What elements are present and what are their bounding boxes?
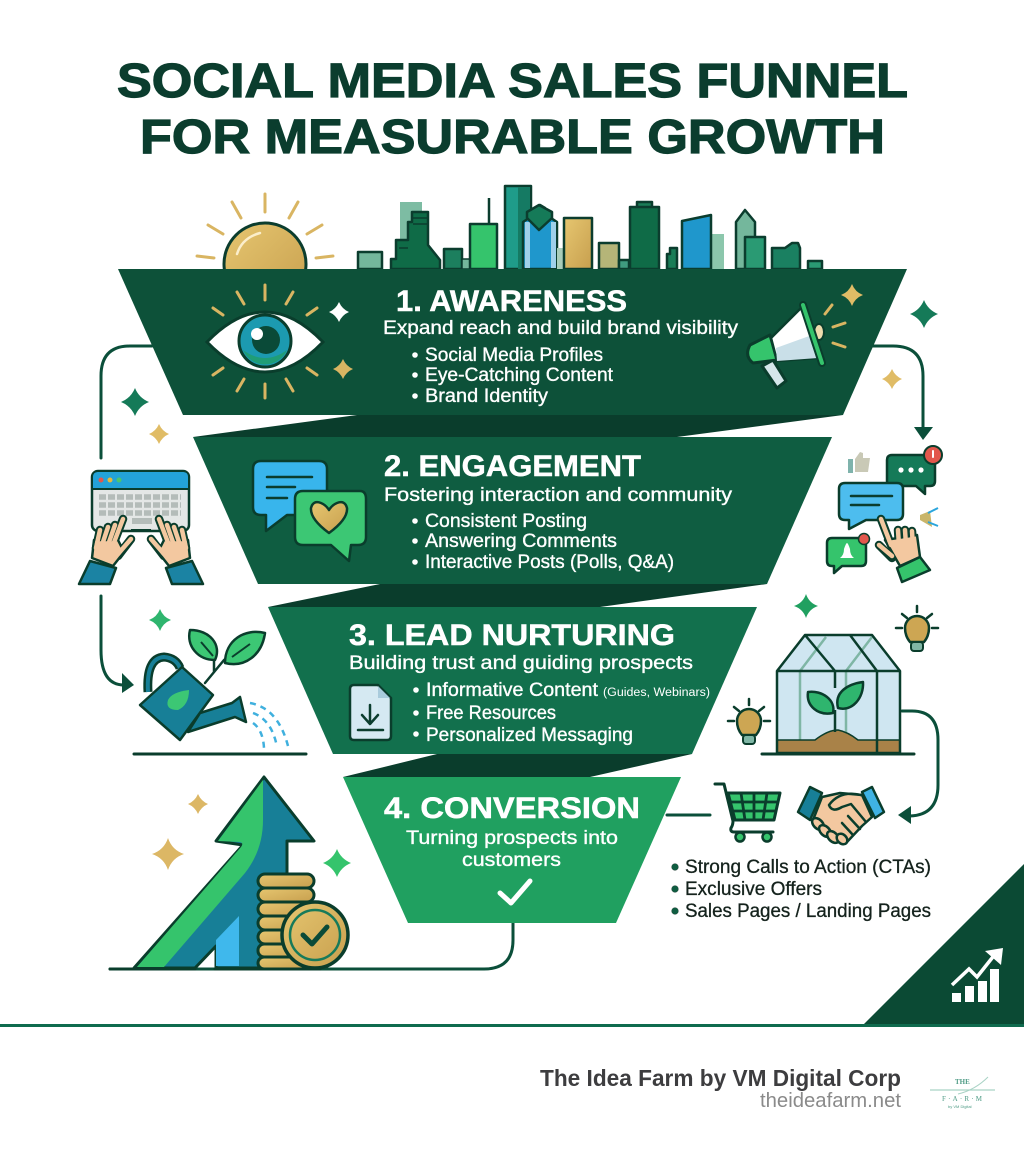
list: lead nurturing items bbox=[413, 680, 710, 746]
connector: awareness to engagement icons bbox=[873, 346, 933, 440]
icon: sun bbox=[196, 192, 334, 269]
icon: growth arrow with coins bbox=[110, 777, 351, 969]
list: engagement items: Consistent Posting bbox=[425, 511, 587, 532]
footer: company name: The Idea Farm by VM Digital Corp bbox=[540, 1065, 901, 1091]
panel: conversion: customers bbox=[462, 850, 561, 871]
connector: greenhouse to handshake bbox=[898, 711, 938, 824]
icon: watering can with plant bbox=[134, 609, 306, 754]
connector: keyboard to watering can bbox=[101, 596, 134, 693]
icon: white sparkle bbox=[329, 302, 349, 322]
icon: green sparkle left bbox=[121, 388, 149, 416]
icon: gold sparkle right bbox=[841, 284, 863, 306]
icon: light bulb left bbox=[728, 699, 770, 744]
icon: handshake bbox=[798, 787, 884, 846]
connector: conversion to growth arrow bbox=[110, 923, 513, 969]
title: SOCIAL MEDIA SALES FUNNEL bbox=[117, 55, 908, 108]
icon: megaphone bbox=[748, 305, 845, 388]
list: engagement items bbox=[412, 511, 674, 573]
panel: engagement shadow bbox=[268, 584, 767, 607]
list: conversion items: Exclusive Offers bbox=[685, 879, 822, 900]
icon: gold sparkle right bbox=[882, 369, 902, 389]
footer: logo: F·A·R·M bbox=[942, 1095, 984, 1103]
text: engagement subtitle: Fostering interaction and community bbox=[384, 485, 733, 506]
heading: conversion: 4. CONVERSION bbox=[384, 792, 640, 825]
panel: lead nurturing shadow bbox=[343, 754, 692, 777]
list: awareness items: Brand Identity bbox=[425, 386, 549, 407]
panel: engagement bbox=[193, 437, 832, 584]
footer: logo: by VM Digital bbox=[948, 1104, 972, 1109]
footer: website: theideafarm.net bbox=[760, 1090, 901, 1112]
panel: awareness shadow bbox=[193, 415, 843, 437]
icon: social notifications and pointing hand bbox=[827, 446, 942, 582]
list: awareness items bbox=[412, 345, 614, 407]
footer: logo: THE bbox=[955, 1078, 970, 1086]
icon: gold sparkle left bbox=[149, 424, 169, 444]
list: lead nurturing items: Free Resources bbox=[426, 703, 556, 724]
icon: greenhouse with seedling bbox=[762, 594, 914, 754]
list: lead nurturing items: Informative Content bbox=[426, 680, 599, 701]
text: awareness subtitle: Expand reach and build brand visibility bbox=[383, 318, 739, 339]
corner triangle with chart icon bbox=[864, 864, 1024, 1024]
list: engagement items: Answering Comments bbox=[425, 531, 617, 552]
icon: download document bbox=[350, 685, 391, 740]
icon: eye bbox=[207, 285, 323, 398]
connector: awareness to keyboard bbox=[101, 346, 152, 458]
footer rule bbox=[0, 1024, 1024, 1027]
list: conversion items: Strong Calls to Action (CTAs) bbox=[685, 857, 931, 878]
panel: awareness bbox=[118, 269, 907, 415]
list: awareness items: Social Media Profiles bbox=[425, 345, 603, 366]
icon: hands on keyboard bbox=[79, 471, 203, 584]
title: FOR MEASURABLE GROWTH bbox=[140, 111, 885, 164]
list: conversion items: Sales Pages / Landing Pages bbox=[685, 901, 931, 922]
heading: awareness: 1. AWARENESS bbox=[396, 285, 627, 318]
connector: conversion to cart bbox=[667, 814, 710, 816]
heading: engagement: 2. ENGAGEMENT bbox=[384, 450, 641, 483]
list: conversion items bbox=[672, 857, 931, 922]
list: lead nurturing items: Personalized Messaging bbox=[426, 725, 633, 746]
list: lead nurturing items: (Guides, Webinars) bbox=[603, 687, 710, 699]
list: awareness items: Eye-Catching Content bbox=[425, 365, 614, 386]
icon: check mark bbox=[500, 881, 530, 903]
icon: shopping cart bbox=[715, 784, 780, 842]
list: engagement items: Interactive Posts (Polls, Q&A) bbox=[425, 552, 674, 573]
heading: lead nurturing: 3. LEAD NURTURING bbox=[349, 619, 675, 652]
icon: chat bubbles bbox=[253, 461, 366, 561]
icon: gold sparkle bbox=[333, 359, 353, 379]
skyline bbox=[358, 186, 822, 269]
panel: lead nurturing bbox=[268, 607, 757, 754]
icon: light bulb right bbox=[896, 606, 938, 651]
panel: conversion bbox=[343, 777, 681, 923]
footer: logo bbox=[930, 1077, 995, 1109]
title bbox=[117, 55, 908, 164]
icon: green sparkle right bbox=[910, 300, 938, 328]
text: lead nurturing subtitle: Building trust and guiding prospects bbox=[349, 653, 693, 674]
text: conversion subtitle: Turning prospects into bbox=[406, 828, 618, 849]
